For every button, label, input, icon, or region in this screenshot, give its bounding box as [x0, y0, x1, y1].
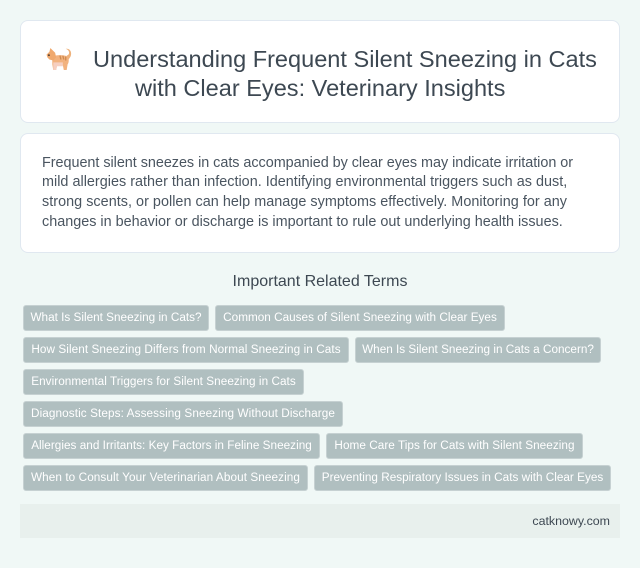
tag: Diagnostic Steps: Assessing Sneezing Without Discharge: [31, 407, 335, 420]
text: summary line 4: changes in behavior or discharge is important to rule out underlying health issues.: [42, 214, 563, 230]
icon: orange cat: [46, 48, 72, 70]
tag: [23, 465, 308, 491]
heading: title line 2: with Clear Eyes: Veterinary Insights: [135, 75, 505, 101]
tag: [355, 337, 601, 363]
tag: [23, 305, 209, 331]
tag: [326, 433, 583, 459]
tag: Environmental Triggers for Silent Sneezing in Cats: [31, 375, 296, 388]
tag: Allergies and Irritants: Key Factors in Feline Sneezing: [31, 439, 312, 452]
heading: related terms: Important Related Terms: [233, 273, 407, 290]
tag: [215, 305, 505, 331]
tag: [23, 433, 320, 459]
tag: When Is Silent Sneezing in Cats a Concern?: [362, 343, 594, 356]
text: summary line 2: mild allergies rather than infection. Identifying environmental triggers such as dust,: [42, 174, 567, 190]
tag: Common Causes of Silent Sneezing with Clear Eyes: [223, 311, 497, 324]
text: summary line 1: Frequent silent sneezes in cats accompanied by clear eyes may indicate irritation or: [42, 155, 573, 171]
tag: When to Consult Your Veterinarian About Sneezing: [31, 471, 300, 484]
tag: Preventing Respiratory Issues in Cats with Clear Eyes: [322, 471, 603, 484]
tag: What Is Silent Sneezing in Cats?: [30, 311, 202, 324]
footer bar: [20, 504, 620, 538]
tag: How Silent Sneezing Differs from Normal Sneezing in Cats: [31, 343, 341, 356]
panel: title card: [20, 20, 620, 123]
heading: title line 1: Understanding Frequent Silent Sneezing in Cats: [93, 46, 597, 72]
tag: Home Care Tips for Cats with Silent Sneezing: [334, 439, 575, 452]
tag: [23, 401, 343, 427]
text: summary line 3: strong scents, or pollen can help manage symptoms effectively. Monitoring for any: [42, 194, 567, 210]
panel: summary card: [20, 133, 620, 253]
tag: [314, 465, 611, 491]
tag: [23, 337, 349, 363]
footer: site name: catknowy.com: [532, 514, 610, 528]
tag: [23, 369, 304, 395]
